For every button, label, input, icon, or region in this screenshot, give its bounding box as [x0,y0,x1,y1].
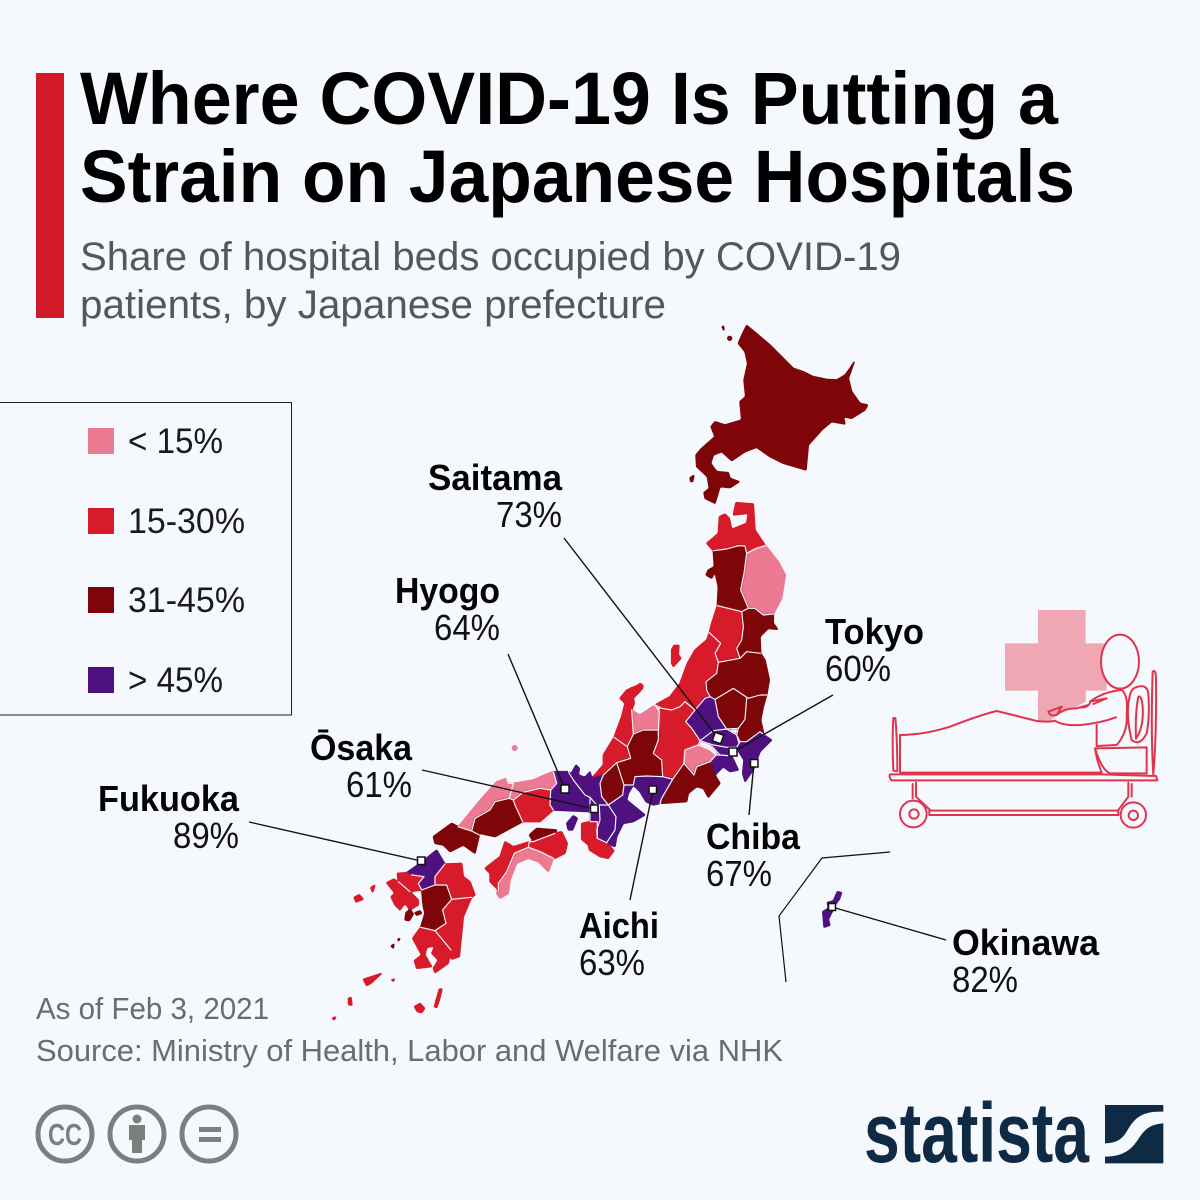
legend: 15-30% [128,502,245,541]
callout: Hyogo [395,570,569,793]
callout: Tokyo [729,611,924,756]
legend [0,402,292,715]
logo: statista mark [1105,1105,1163,1163]
callout: Saitama [428,457,724,744]
callout: Aichi: Aichi [579,905,659,946]
callout: Osaka: Ōsaka [310,727,413,768]
subtitle: patients, by Japanese prefecture [80,283,666,327]
Okinawa inset frame [779,852,890,982]
legend: > 45% [128,661,223,700]
icon: red cross [1005,610,1107,721]
callout: Osaka [310,727,598,812]
callout: Tokyo: Tokyo [825,611,924,652]
callout: Okinawa: 82% [952,959,1018,1000]
title [80,57,1075,218]
title: Strain on Japanese Hospitals [80,135,1075,218]
subtitle [80,235,901,327]
Chugoku and Shikoku prefectures [433,746,567,898]
callout: Tokyo: 60% [825,648,891,689]
callout: Chiba [706,760,801,894]
callout: Okinawa [828,904,1100,1000]
prefecture borders [398,546,773,950]
title: Where COVID-19 Is Putting a [80,57,1059,140]
title accent bar [36,73,64,318]
icon: attribution person [110,1107,164,1161]
callout: Hyogo: Hyogo [395,570,500,611]
callout: Chiba: 67% [706,853,772,894]
Chubu, Kanto and Kansai prefectures [550,633,772,858]
callout: Saitama: 73% [496,494,562,535]
callout: Fukuoka [98,778,425,864]
callout: Aichi [579,786,659,983]
legend: < 15% [128,422,223,461]
icon: hospital bed with patient and red cross [890,610,1157,828]
Okinawa [823,892,842,927]
callout: Hyogo: 64% [434,607,500,648]
source note: As of Feb 3, 2021 [36,991,269,1026]
legend: 31-45% [128,581,245,620]
map of Japan [332,325,868,1020]
callout: Chiba: Chiba [706,816,801,857]
subtitle: Share of hospital beds occupied by COVID-19 [80,235,901,279]
icon: Creative Commons CC [38,1107,92,1161]
Kyushu prefectures [332,850,475,1020]
callout: Saitama: Saitama [428,457,563,498]
Tohoku prefectures [620,503,785,700]
callout: Fukuoka: 89% [173,815,239,856]
callout: Okinawa: Okinawa [952,922,1100,963]
icon: no derivatives equals [182,1107,236,1161]
source note [36,991,783,1068]
source note: Source: Ministry of Health, Labor and Welfare via NHK [36,1033,783,1068]
Hokkaido [690,325,868,503]
logo: statista wordmark: statista [864,1086,1090,1180]
callout: Osaka: 61% [346,764,412,805]
icon: Creative Commons CC: CC [48,1117,82,1152]
callout: Aichi: 63% [579,942,645,983]
callout: Fukuoka: Fukuoka [98,778,240,819]
